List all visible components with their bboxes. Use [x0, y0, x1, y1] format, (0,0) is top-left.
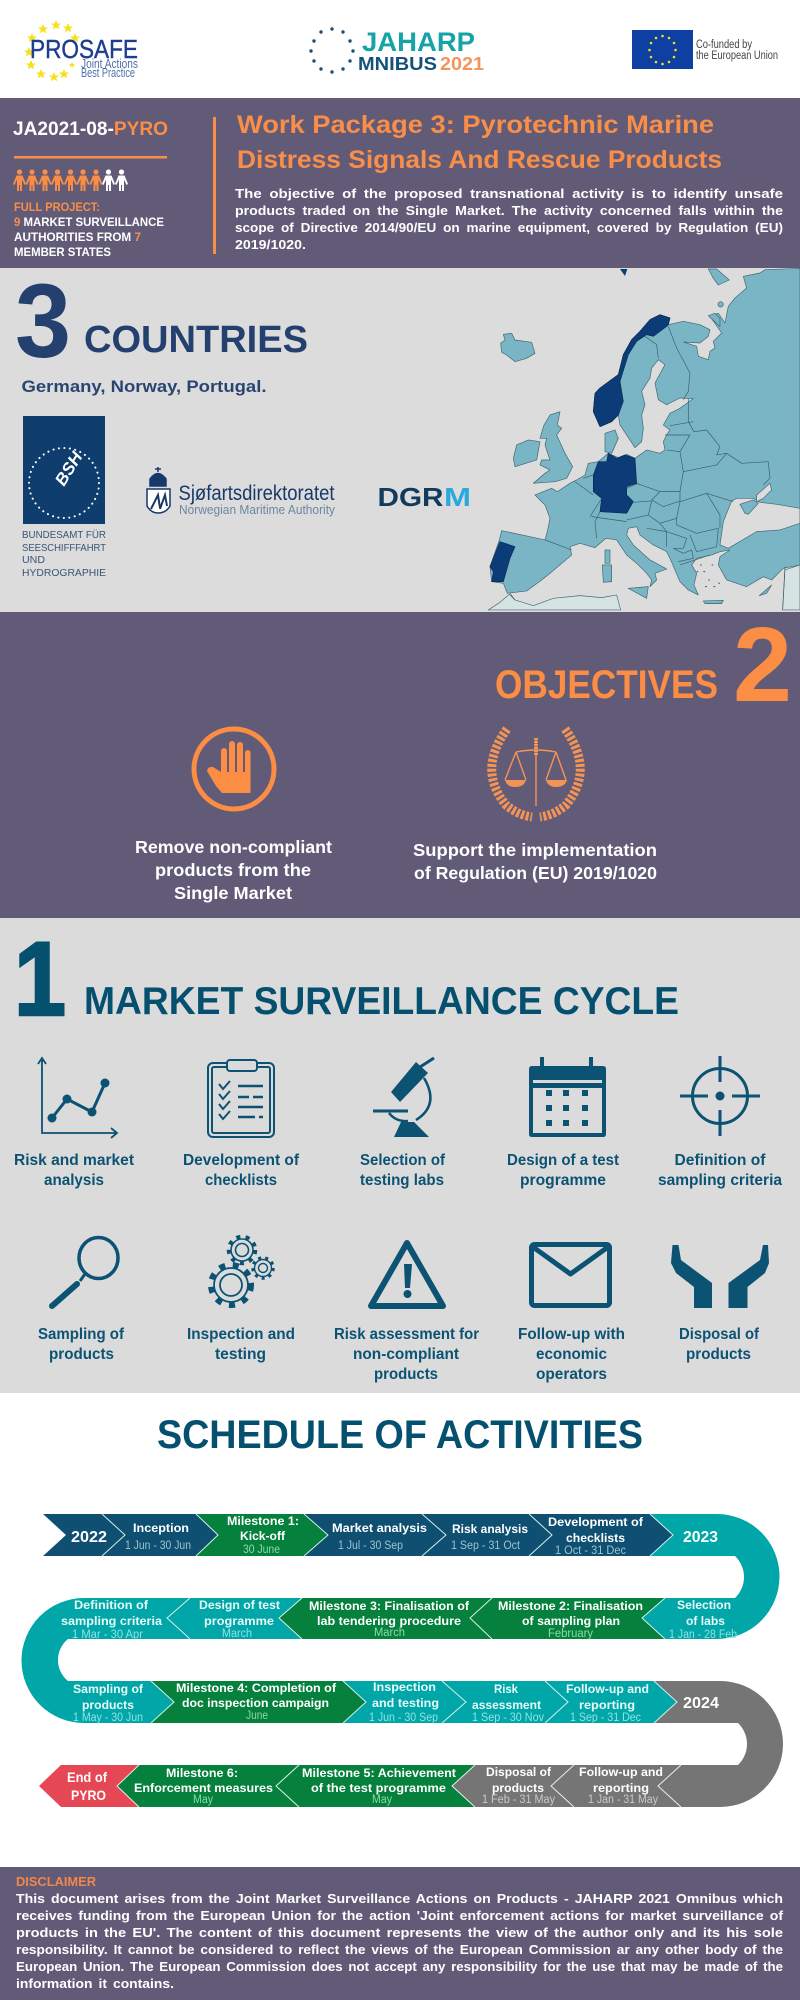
label: selection of testing labs: testing labs [360, 1172, 444, 1189]
disclaimer text: receives funding from the European Union for the action 'Joint enforcement actions for market surveillance of [16, 1908, 784, 1923]
map: Norway [593, 315, 670, 427]
label: risk assessment for non-compliant products: Risk assessment for [334, 1326, 479, 1343]
logo: EU co-funded: the European Union [696, 50, 778, 62]
timeline row 4: 2024: PYRO [71, 1787, 106, 1803]
timeline row 3: mid 2023: Risk [494, 1682, 518, 1696]
icon: target crosshair [680, 1056, 760, 1136]
timeline row 3: mid 2023: Follow-up and [566, 1682, 649, 1696]
project code: JA2021-08-PYRO [13, 119, 168, 140]
objective text: support regulation: Support the implementation [413, 840, 657, 860]
heading: schedule of activities: SCHEDULE OF ACTIVITIES [157, 1413, 643, 1457]
icon: calendar [529, 1057, 606, 1137]
label: inspection and testing: testing [215, 1346, 266, 1363]
label: follow-up with economic operators: operators [536, 1366, 607, 1383]
label: risk assessment for non-compliant products: non-compliant [353, 1346, 459, 1363]
timeline row 2: 2023: Milestone 2: Finalisation [498, 1599, 643, 1613]
timeline row 4: 2024 [39, 1765, 681, 1807]
label: risk assessment for non-compliant products: products [374, 1366, 438, 1383]
label: selection of testing labs: Selection of [360, 1152, 446, 1169]
timeline row 2: 2023: sampling criteria [61, 1614, 162, 1628]
logo: JAHARP Omnibus 2021 [309, 27, 484, 74]
timeline row 1: 2022: Inception [133, 1521, 189, 1535]
timeline row 1: 2022: 2023 [683, 1529, 718, 1546]
timeline row 4: 2024: Disposal of [486, 1765, 552, 1779]
objective text: support regulation: of Regulation (EU) 2019/1020 [414, 863, 657, 883]
timeline row 4: 2024: Milestone 6: [166, 1766, 238, 1780]
timeline row 2: 2023: programme [204, 1614, 274, 1628]
timeline row 1: 2022: Milestone 1: [227, 1514, 299, 1528]
logo: JAHARP Omnibus 2021: JAHARP [362, 27, 475, 57]
icon: laurel wreath and scales [492, 729, 580, 817]
logo: Sjofartsdirektoratet [147, 467, 335, 517]
timeline row 3: mid 2023: Sampling of [73, 1682, 144, 1696]
heading: objectives: OBJECTIVES [495, 663, 718, 707]
disclaimer text: This document arises from the Joint Market Surveillance Actions on Products - JAHARP 2021 Omnibus which [16, 1891, 783, 1906]
logo: BSH: SEESCHIFFFAHRT [22, 542, 107, 554]
timeline row 1: 2022: Development of [548, 1515, 644, 1529]
label: definition of sampling criteria [658, 1152, 782, 1189]
timeline row 2: 2023: March [374, 1627, 405, 1639]
logo: PROSAFE: PROSAFE [30, 34, 138, 64]
timeline row 1: 2022: 1 Oct - 31 Dec [555, 1545, 626, 1557]
timeline row 2: 2023: of sampling plan [522, 1614, 620, 1628]
logo: BSH: HYDROGRAPHIE [22, 567, 106, 579]
timeline row 3: mid 2023: products [82, 1698, 134, 1712]
logo: PROSAFE: Joint Actions [81, 57, 138, 71]
work package title: Work Package 3: Pyrotechnic Marine [237, 111, 714, 139]
timeline row 4: 2024: 1 Feb - 31 May [482, 1794, 555, 1806]
map: islands [501, 269, 772, 604]
label: disposal of products: Disposal of [679, 1326, 760, 1343]
label: design of a test programme: Design of a test [507, 1152, 619, 1169]
timeline row 1: 2022: Market analysis [332, 1521, 427, 1535]
label: definition of sampling criteria: Definition of [674, 1152, 766, 1169]
objective description: scope of Directive 2014/90/EU on marine equipment, covered by Regulation (EU) [235, 220, 783, 235]
panel: countries [0, 263, 800, 612]
timeline row 3: mid 2023: 2024 [683, 1695, 719, 1712]
timeline row 3: mid 2023: 1 May - 30 Jun [73, 1712, 143, 1724]
icon: nine people, seven orange and two white [13, 169, 128, 191]
label: sampling of products [38, 1326, 125, 1363]
timeline row 4: 2024: of the test programme [311, 1781, 446, 1795]
icon: gears [211, 1237, 273, 1305]
map: Germany [593, 453, 637, 513]
disclaimer text: products in the EU'. The content of this document represents the view of the author only and its his sole [16, 1925, 783, 1940]
label: risk and market analysis: analysis [44, 1172, 104, 1189]
timeline row 1: 2022: 1 Sep - 31 Oct [451, 1540, 521, 1552]
timeline row 2: 2023: March [222, 1628, 252, 1640]
label: definition of sampling criteria: sampling criteria [658, 1172, 782, 1189]
timeline row 1: 2022: 1 Jul - 30 Sep [338, 1540, 403, 1552]
panel: market surveillance cycle [0, 918, 800, 1393]
big number 2: 2 [733, 606, 792, 724]
icon: magnifying glass [52, 1238, 118, 1306]
label: sampling of products: Sampling of [38, 1326, 125, 1343]
icon: line chart [38, 1058, 117, 1138]
timeline row 4: 2024: 1 Jan - 31 May [588, 1794, 658, 1806]
timeline row 4: 2024: Milestone 5: Achievement [302, 1766, 456, 1780]
timeline row 3: mid 2023: doc inspection campaign [182, 1696, 329, 1710]
objective description: products traded on the Single Market. The activity concerned falls within the [235, 203, 783, 218]
timeline row 4: 2024: May [193, 1794, 213, 1806]
timeline row 3: mid 2023 [73, 1680, 783, 1807]
label: design of a test programme [507, 1152, 619, 1189]
icon: clipboard checklist [208, 1060, 274, 1137]
icon: stop hand [194, 729, 274, 809]
timeline row 2: 2023: 1 Jan - 28 Feb [669, 1629, 737, 1641]
objective text: remove non-compliant products: products from the [155, 860, 311, 880]
timeline row 2: 2023: Selection [677, 1598, 731, 1612]
timeline row 1: 2022: checklists [566, 1531, 625, 1545]
work package title [237, 111, 722, 174]
logo: BSH [22, 416, 107, 579]
objective description: 2019/1020. [235, 237, 306, 252]
full project summary: 9 MARKET SURVEILLANCE [14, 217, 164, 229]
icon: warning triangle [371, 1243, 443, 1306]
icon: envelope [532, 1244, 610, 1306]
full project summary: FULL PROJECT: [14, 202, 100, 214]
big number 1: 1 [14, 921, 66, 1038]
timeline row 4: 2024: End of [67, 1769, 107, 1785]
label: design of a test programme: programme [520, 1172, 606, 1189]
label: follow-up with economic operators: economic [536, 1346, 607, 1363]
panel: disclaimer [0, 1867, 800, 2000]
label: risk and market analysis: Risk and market [14, 1152, 134, 1169]
timeline row 2: 2023: Milestone 3: Finalisation of [309, 1599, 470, 1613]
logo: BSH: BUNDESAMT FÜR [22, 529, 106, 541]
chart: snake timeline of activities [22, 1514, 783, 1807]
map: borders [510, 326, 785, 610]
icon: microscope [373, 1058, 434, 1137]
country list: Germany, Norway, Portugal. [22, 377, 266, 396]
heading: market surveillance cycle: MARKET SURVEILLANCE CYCLE [84, 980, 679, 1023]
label: development of checklists [183, 1152, 300, 1189]
full project summary: AUTHORITIES FROM 7 [14, 232, 141, 244]
full project summary [14, 202, 164, 259]
timeline row 1: 2022: 30 June [243, 1544, 280, 1556]
timeline row 1: 2022: Kick-off [240, 1529, 286, 1543]
label: development of checklists: Development of [183, 1152, 300, 1169]
logo: DGRM: DGR [378, 482, 444, 512]
objective text: remove non-compliant products: Single Market [174, 883, 292, 903]
timeline row 2: 2023: of labs [686, 1614, 725, 1628]
logo: DGRM: M [444, 482, 471, 512]
logo: PROSAFE: Best Practice [81, 66, 135, 80]
big number 3: 3 [15, 263, 71, 380]
label: inspection and testing [187, 1326, 295, 1363]
map: Aegean islands [697, 565, 720, 587]
disclaimer text: information it contains. [16, 1976, 174, 1991]
map: Portugal [490, 542, 515, 582]
logo: Sjofartsdirektoratet: Sjøfartsdirektoratet [178, 482, 335, 505]
disclaimer text: responsibility. It cannot be considered to reflect the views of the European Commission ar any other body of the [16, 1942, 783, 1957]
timeline row 3: mid 2023: reporting [579, 1698, 635, 1712]
label: risk and market analysis [14, 1152, 134, 1189]
map: Black Sea and Sea of Azov [720, 498, 800, 548]
logo: BSH: BSH [51, 448, 87, 489]
logo: DGRM [378, 482, 471, 512]
logo: BSH: UND [22, 554, 45, 566]
panel: objectives [0, 606, 800, 918]
logo: Sjofartsdirektoratet: Norwegian Maritime Authority [179, 502, 335, 517]
label: inspection and testing: Inspection and [187, 1326, 295, 1343]
timeline row 1: 2022: 1 Jun - 30 Jun [125, 1540, 191, 1552]
timeline row 2: 2023: Design of test [199, 1598, 280, 1612]
timeline row 1: 2022: Risk analysis [452, 1522, 528, 1536]
full project summary: MEMBER STATES [14, 247, 111, 259]
panel: project header [0, 98, 800, 268]
logo: JAHARP Omnibus 2021: 2021 [440, 53, 484, 74]
logo: PROSAFE [24, 20, 138, 81]
logo: EU co-funded: Co-funded by [696, 39, 752, 51]
timeline row 3: mid 2023: June [246, 1710, 268, 1722]
label: development of checklists: checklists [205, 1172, 277, 1189]
timeline row 2: 2023: 1 Mar - 30 Apr [72, 1629, 143, 1641]
timeline row 4: 2024: Follow-up and [579, 1765, 663, 1779]
timeline row 3: mid 2023: 1 Jun - 30 Sep [369, 1712, 438, 1724]
logo: EU co-funded [632, 30, 778, 69]
label: disposal of products [679, 1326, 760, 1363]
timeline row 3: mid 2023: 1 Sep - 31 Dec [570, 1712, 641, 1724]
disclaimer text: European Union. The European Commission does not accept any responsibility for the use that may be made of the [16, 1959, 783, 1974]
disclaimer heading: DISCLAIMER [16, 1874, 97, 1889]
timeline row 3: mid 2023: and testing [372, 1696, 439, 1710]
timeline row 2: 2023: Definition of [74, 1598, 149, 1612]
disclaimer text [16, 1891, 784, 1991]
label: selection of testing labs [360, 1152, 446, 1189]
label: disposal of products: products [686, 1346, 751, 1363]
timeline row 3: mid 2023: Milestone 4: Completion of [176, 1681, 337, 1695]
timeline row 3: mid 2023: Inspection [373, 1680, 436, 1694]
objective text: remove non-compliant products: Remove non-compliant [135, 837, 332, 857]
timeline row 2: 2023: lab tendering procedure [317, 1614, 461, 1628]
objective description: The objective of the proposed transnational activity is to identify unsafe [235, 186, 783, 201]
timeline row 4: 2024: products [492, 1781, 544, 1795]
map: Europe with Germany, Norway and Portugal highlighted [488, 268, 800, 610]
objective text: remove non-compliant products [135, 837, 332, 903]
label: follow-up with economic operators [518, 1326, 625, 1383]
objective text: support regulation [413, 840, 657, 883]
timeline row 3: mid 2023: 1 Sep - 30 Nov [472, 1712, 544, 1724]
logo: JAHARP Omnibus 2021: MNIBUS [358, 53, 437, 74]
label: risk assessment for non-compliant products [334, 1326, 479, 1383]
timeline row 4: 2024: reporting [593, 1781, 649, 1795]
timeline row 4: 2024: Enforcement measures [134, 1781, 273, 1795]
work package title: Distress Signals And Rescue Products [237, 146, 722, 174]
label: follow-up with economic operators: Follow-up with [518, 1326, 625, 1343]
heading: countries: COUNTRIES [84, 319, 308, 361]
timeline row 1: 2022: 2022 [71, 1529, 107, 1546]
timeline row 2: 2023 [22, 1598, 737, 1723]
timeline row 2: 2023: February [548, 1628, 593, 1640]
timeline row 1: 2022 [43, 1514, 780, 1639]
icon: open hands [671, 1245, 769, 1308]
timeline row 4: 2024: May [372, 1794, 392, 1806]
label: sampling of products: products [49, 1346, 114, 1363]
timeline row 3: mid 2023: assessment [472, 1698, 541, 1712]
objective description [235, 186, 783, 252]
